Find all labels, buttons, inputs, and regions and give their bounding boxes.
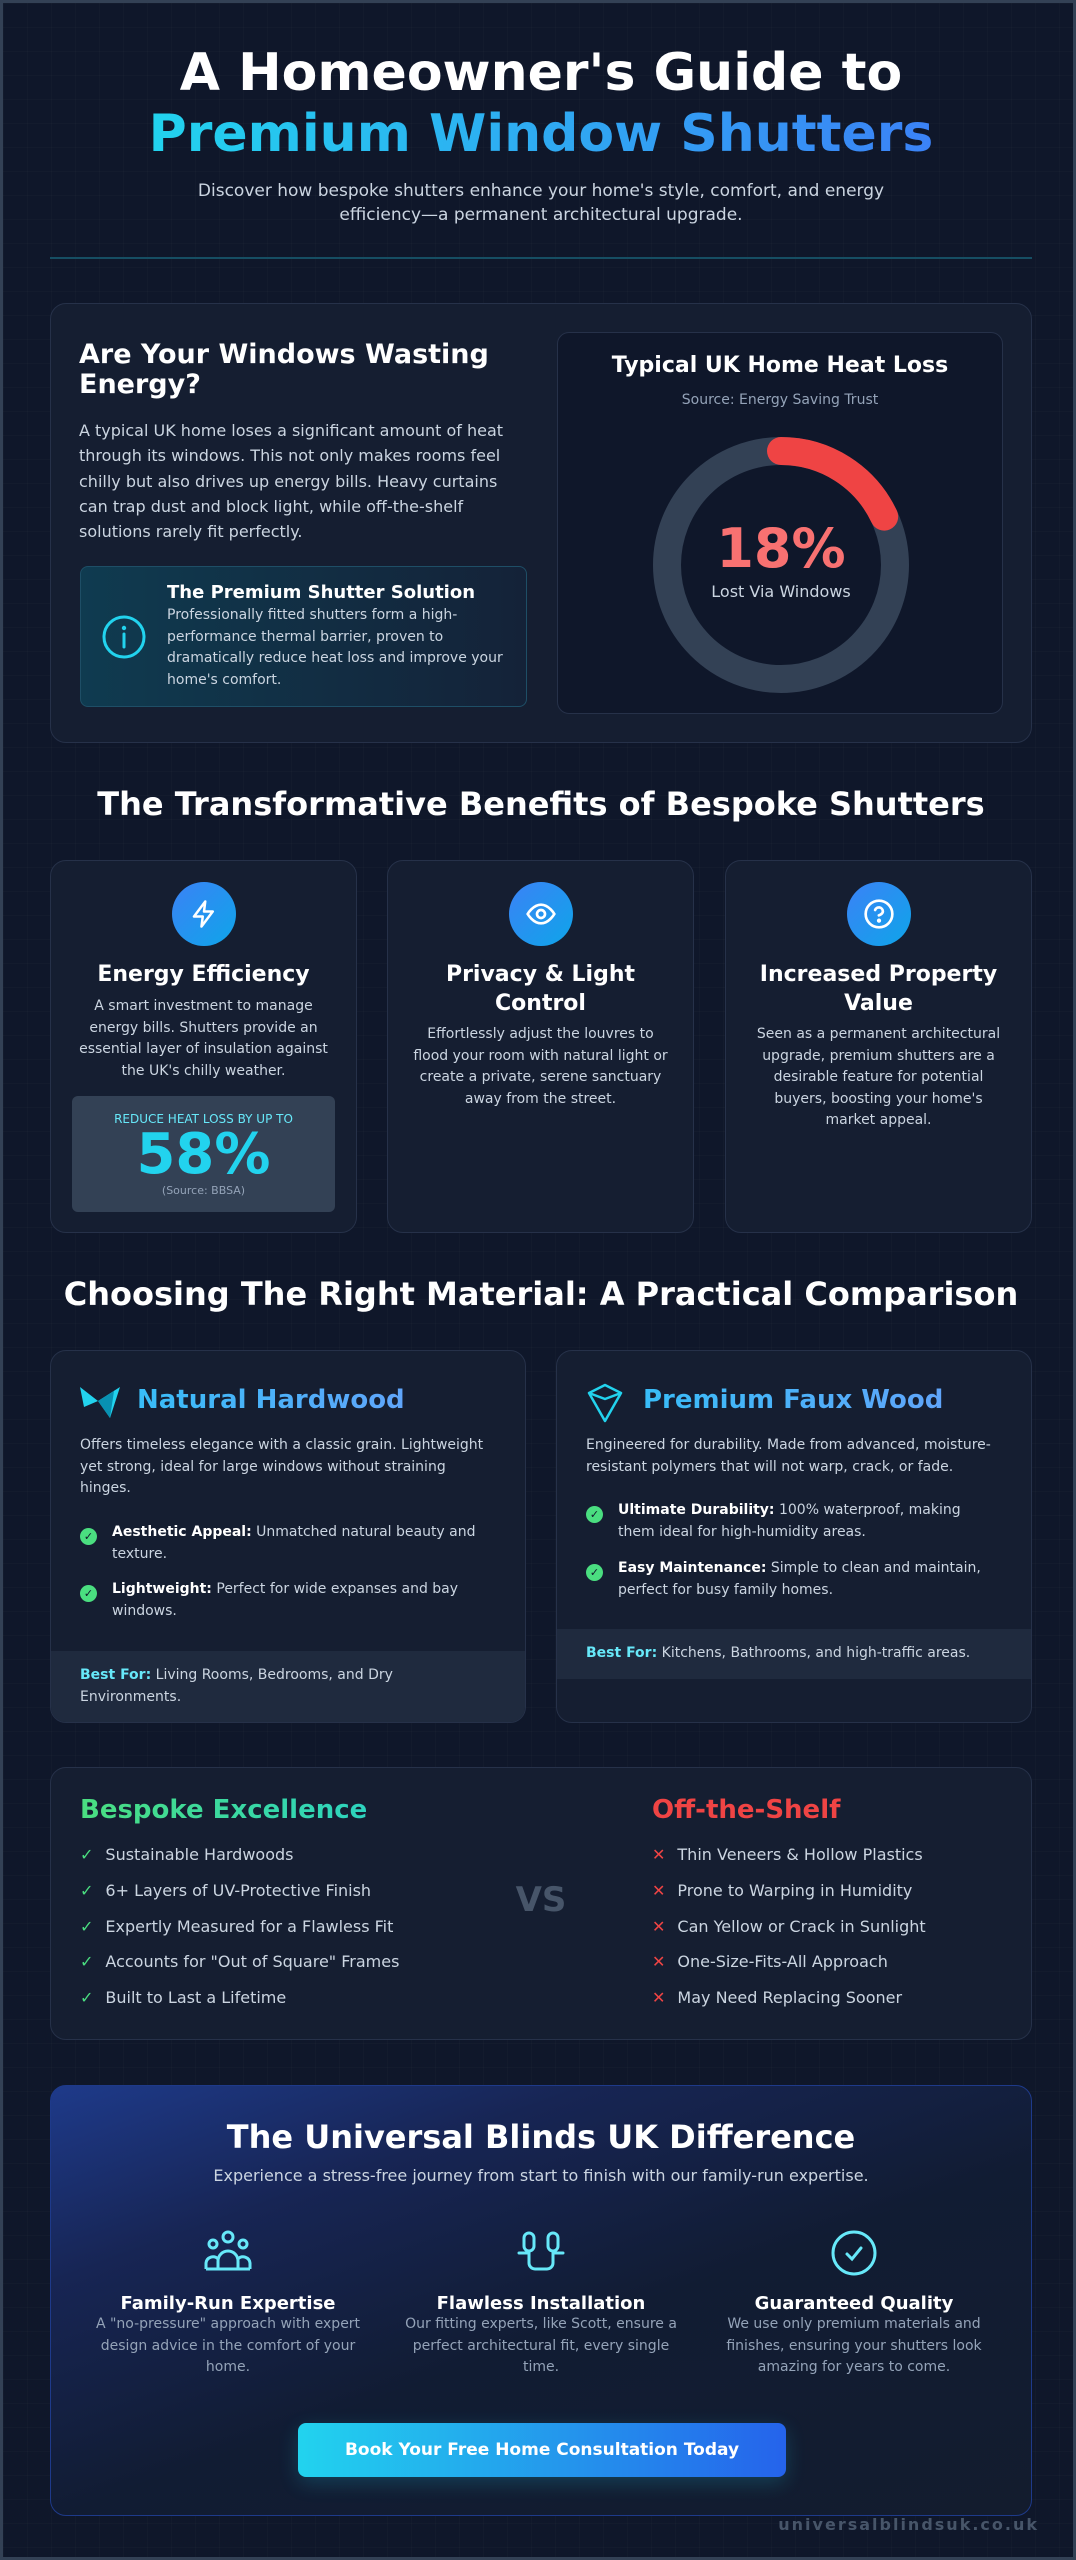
- heading: off-the-shelf: Off-the-Shelf: [652, 1795, 840, 1825]
- panel: bespoke vs off-the-shelf: ✕ Thin Veneers & Hollow Plastics: [652, 1845, 923, 1864]
- text: solution: Professionally fitted shutters form a high-performance thermal barrier, proven to dramatically reduce heat loss and improve your home's comfort.: [167, 607, 503, 688]
- bullet: durability: [586, 1502, 961, 1540]
- panel: bespoke vs off-the-shelf: ✕ Prone to Warping in Humidity: [652, 1881, 912, 1900]
- panel: privacy: [387, 860, 694, 1233]
- bullet: maintenance: [586, 1560, 981, 1598]
- title: Premium Window Shutters: [149, 104, 933, 164]
- panel: natural hardwood: [50, 1350, 526, 1723]
- panel: property value: Increased Property: [760, 962, 997, 987]
- panel: faux wood: ✓: [590, 1566, 599, 1579]
- icon: question: [846, 882, 910, 946]
- icon: eye: [508, 882, 572, 946]
- footer: website: universalblindsuk.co.uk: [778, 2515, 1039, 2534]
- subtitle: Discover how bespoke shutters enhance your home's style, comfort, and energy efficiency—a permanent architectural upgrade.: [198, 181, 884, 225]
- bullet: lightweight: [80, 1581, 458, 1618]
- panel: bespoke vs off-the-shelf: [50, 1767, 1032, 2040]
- heading: windows wasting energy: Are Your Windows Wasting Energy?: [79, 339, 489, 400]
- panel: natural hardwood: ✓: [84, 1530, 93, 1543]
- panel: natural hardwood: ✓: [84, 1587, 93, 1600]
- callout: premium shutter solution: [80, 566, 527, 707]
- chart title: Typical UK Home Heat Loss: [612, 353, 948, 378]
- feature: installation: Our fitting experts, like Scott, ensure a perfect architectural fit, every single time.: [405, 2316, 677, 2375]
- panel: bespoke vs off-the-shelf: ✓ 6+ Layers of UV-Protective Finish: [80, 1881, 371, 1900]
- donut chart: [653, 437, 909, 693]
- donut chart: 18%: [716, 517, 846, 580]
- panel: bespoke vs off-the-shelf: ✓ Expertly Measured for a Flawless Fit: [80, 1917, 393, 1936]
- panel: faux wood: Ultimate Durability: 100% waterproof, making them ideal for high-humidity areas.: [618, 1502, 961, 1540]
- panel: bespoke vs off-the-shelf: ✓ Built to Last a Lifetime: [80, 1988, 286, 2007]
- title: [149, 43, 933, 164]
- heading: The Universal Blinds UK Difference: [227, 2118, 855, 2156]
- panel: bespoke vs off-the-shelf: ✓ Accounts for "Out of Square" Frames: [80, 1952, 399, 1971]
- feature: installation: [405, 2232, 677, 2375]
- panel: property value: [725, 860, 1032, 1233]
- feature: family-run: A "no-pressure" approach with expert design advice in the comfort of your home.: [96, 2316, 360, 2375]
- chart card: heat loss donut: [557, 332, 1003, 714]
- icon: faux wood gem: [588, 1384, 622, 1422]
- panel: faux wood: ✓: [590, 1508, 599, 1521]
- best for band: Best For: Living Rooms, Bedrooms, and Dry Environments.: [80, 1667, 393, 1704]
- heading: benefits: The Transformative Benefits of Bespoke Shutters: [97, 785, 985, 823]
- heading: bespoke: Bespoke Excellence: [80, 1795, 367, 1825]
- button: book consultation: Book Your Free Home Consultation Today: [345, 2440, 739, 2460]
- list: off-the-shelf: [652, 1845, 926, 2007]
- feature: quality: We use only premium materials and finishes, ensuring your shutters look amazing for years to come.: [726, 2316, 982, 2375]
- icon: lightning: [172, 882, 236, 946]
- panel: property value: Value: [844, 991, 913, 1016]
- text: problem description: A typical UK home loses a significant amount of heat through its windows. This not only makes rooms feel chilly but also drives up energy bills. Heavy curtains can trap dust and block light, while off-the-shelf solutions rarely fit perfectly.: [79, 421, 503, 541]
- chart source: Source: Energy Saving Trust: [682, 392, 878, 408]
- panel: bespoke vs off-the-shelf: ✕ One-Size-Fits-All Approach: [652, 1952, 888, 1971]
- panel: privacy: Effortlessly adjust the louvres to flood your room with natural light or create a private, serene sanctuary away from the street.: [413, 1026, 668, 1106]
- feature: family-run: Family-Run Expertise: [120, 2293, 336, 2314]
- subtitle: Experience a stress-free journey from start to finish with our family-run expertise.: [213, 2166, 869, 2185]
- panel: universal blinds difference: [50, 2085, 1032, 2516]
- panel: privacy: Control: [495, 991, 586, 1016]
- panel: natural hardwood: Lightweight: Perfect for wide expanses and bay windows.: [112, 1581, 458, 1618]
- panel: energy efficiency: Energy Efficiency: [97, 962, 310, 987]
- feature: installation: Flawless Installation: [437, 2293, 645, 2314]
- panel: privacy: Privacy & Light: [446, 962, 635, 987]
- panel: natural hardwood: Aesthetic Appeal: Unmatched natural beauty and texture.: [112, 1524, 476, 1562]
- stat: 58%: [72, 1096, 335, 1212]
- best for band: [51, 1651, 525, 1724]
- stat: 58%: REDUCE HEAT LOSS BY UP TO: [114, 1112, 293, 1126]
- vs label: VS: [516, 1880, 566, 1920]
- panel: natural hardwood: Offers timeless elegance with a classic grain. Lightweight yet strong, ideal for large windows without straining hinges.: [80, 1437, 483, 1496]
- feature: quality: Guaranteed Quality: [755, 2293, 953, 2314]
- best for band: [557, 1629, 1031, 1679]
- icon: fitting: [518, 2232, 564, 2270]
- panel: property value: Seen as a permanent architectural upgrade, premium shutters are a desirable feature for potential buyers, boosting your home's market appeal.: [757, 1026, 1000, 1128]
- icon: people: [204, 2230, 252, 2270]
- panel: heat loss problem: [50, 303, 1032, 743]
- list: bespoke: [80, 1845, 399, 2007]
- panel: energy efficiency: A smart investment to manage energy bills. Shutters provide an essential layer of insulation against the UK's chilly weather.: [79, 998, 328, 1078]
- icon: check circle: [832, 2230, 876, 2276]
- donut chart: Lost Via Windows: [711, 582, 851, 601]
- title: A Homeowner's Guide to: [180, 43, 902, 103]
- feature: family-run: [96, 2230, 360, 2375]
- button: book consultation: [298, 2423, 786, 2477]
- panel: faux wood: Engineered for durability. Made from advanced, moisture-resistant polymers that will not warp, crack, or fade.: [586, 1437, 991, 1474]
- panel: faux wood: [556, 1350, 1032, 1723]
- panel: faux wood: Easy Maintenance: Simple to clean and maintain, perfect for busy family homes.: [618, 1560, 981, 1598]
- best for band: Best For: Kitchens, Bathrooms, and high-traffic areas.: [586, 1645, 970, 1661]
- panel: energy efficiency: [50, 860, 357, 1233]
- heading: materials: Choosing The Right Material: A Practical Comparison: [64, 1275, 1018, 1313]
- panel: bespoke vs off-the-shelf: ✕ Can Yellow or Crack in Sunlight: [652, 1917, 926, 1936]
- icon: hardwood: [80, 1387, 120, 1418]
- bullet: aesthetic: [80, 1524, 476, 1562]
- panel: bespoke vs off-the-shelf: ✕ May Need Replacing Sooner: [652, 1988, 902, 2007]
- panel: bespoke vs off-the-shelf: ✓ Sustainable Hardwoods: [80, 1845, 293, 1864]
- panel: natural hardwood: Natural Hardwood: [137, 1385, 405, 1415]
- feature: quality: [726, 2230, 982, 2375]
- stat: 58%: (Source: BBSA): [162, 1184, 245, 1197]
- icon: info: [102, 616, 146, 658]
- stat: 58%: 58%: [136, 1122, 271, 1187]
- panel: faux wood: Premium Faux Wood: [643, 1385, 943, 1415]
- text: solution: The Premium Shutter Solution: [167, 582, 475, 603]
